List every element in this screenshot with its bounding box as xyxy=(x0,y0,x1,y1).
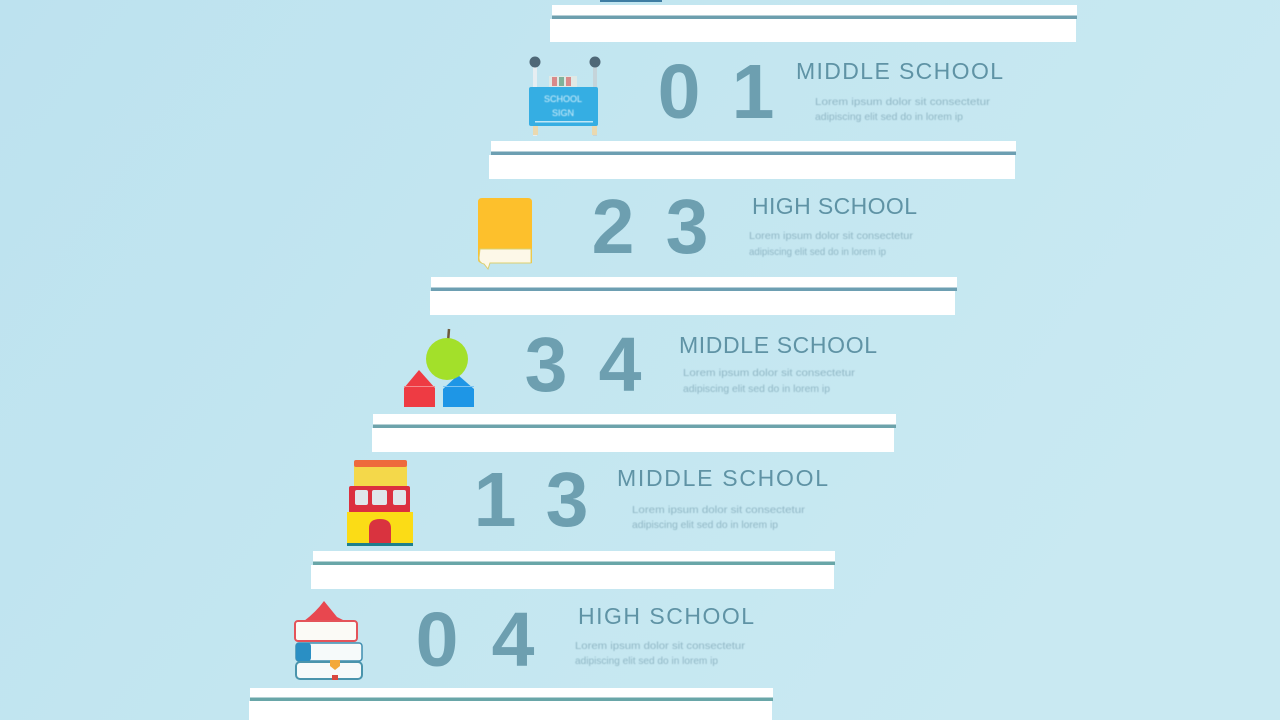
description xyxy=(815,96,991,123)
number 34: 3 xyxy=(525,322,567,408)
number 23: 3 xyxy=(666,184,708,270)
description: Lorem ipsum dolor sit consectetur xyxy=(575,640,746,652)
step: 34 middle school xyxy=(372,322,896,452)
icon: school building xyxy=(347,460,413,546)
heading: HIGH SCHOOL xyxy=(578,603,754,629)
description xyxy=(632,504,806,531)
description: Lorem ipsum dolor sit consectetur xyxy=(749,230,914,242)
shelf xyxy=(249,688,773,720)
number 34: 4 xyxy=(599,322,642,408)
heading: MIDDLE SCHOOL xyxy=(796,58,1003,84)
number 01: 1 xyxy=(732,49,774,135)
shelf xyxy=(311,551,835,589)
description xyxy=(749,230,914,258)
step: 13 middle school xyxy=(311,457,835,589)
number 01: 0 xyxy=(658,49,700,135)
icon: school sign xyxy=(529,56,600,136)
description: adipiscing elit sed do in lorem ip xyxy=(632,519,778,531)
top icon remnant xyxy=(600,0,662,2)
description xyxy=(575,640,746,667)
description: Lorem ipsum dolor sit consectetur xyxy=(683,367,856,379)
step: 01 middle school xyxy=(489,49,1016,179)
number 01 xyxy=(658,49,774,135)
shelf xyxy=(372,414,896,452)
icon: apple and blocks xyxy=(404,329,474,407)
description: adipiscing elit sed do in lorem ip xyxy=(815,111,963,123)
heading: HIGH SCHOOL xyxy=(752,193,917,219)
number 23: 2 xyxy=(592,184,634,270)
description: adipiscing elit sed do in lorem ip xyxy=(749,246,886,258)
icon: school sign: SCHOOL xyxy=(544,94,582,104)
description: Lorem ipsum dolor sit consectetur xyxy=(632,504,806,516)
icon: yellow book xyxy=(478,198,532,269)
heading: MIDDLE SCHOOL xyxy=(617,465,828,491)
icon: school sign: SIGN xyxy=(552,108,574,118)
number 34 xyxy=(525,322,642,408)
heading: MIDDLE SCHOOL xyxy=(679,332,877,358)
description: Lorem ipsum dolor sit consectetur xyxy=(815,96,991,108)
number 04 xyxy=(416,597,535,683)
shelf xyxy=(489,141,1016,179)
step: 04 high school xyxy=(249,597,773,720)
number 23 xyxy=(592,184,708,270)
icon: stacked books xyxy=(295,601,362,680)
shelf: top step xyxy=(550,5,1077,42)
number 04: 0 xyxy=(416,597,458,683)
shelf xyxy=(430,277,957,315)
step: 23 high school xyxy=(430,184,957,315)
description xyxy=(683,367,856,395)
number 13: 1 xyxy=(474,457,516,543)
description: adipiscing elit sed do in lorem ip xyxy=(683,383,830,395)
number 13 xyxy=(474,457,588,543)
description: adipiscing elit sed do in lorem ip xyxy=(575,655,718,667)
number 04: 4 xyxy=(492,597,535,683)
number 13: 3 xyxy=(546,457,588,543)
